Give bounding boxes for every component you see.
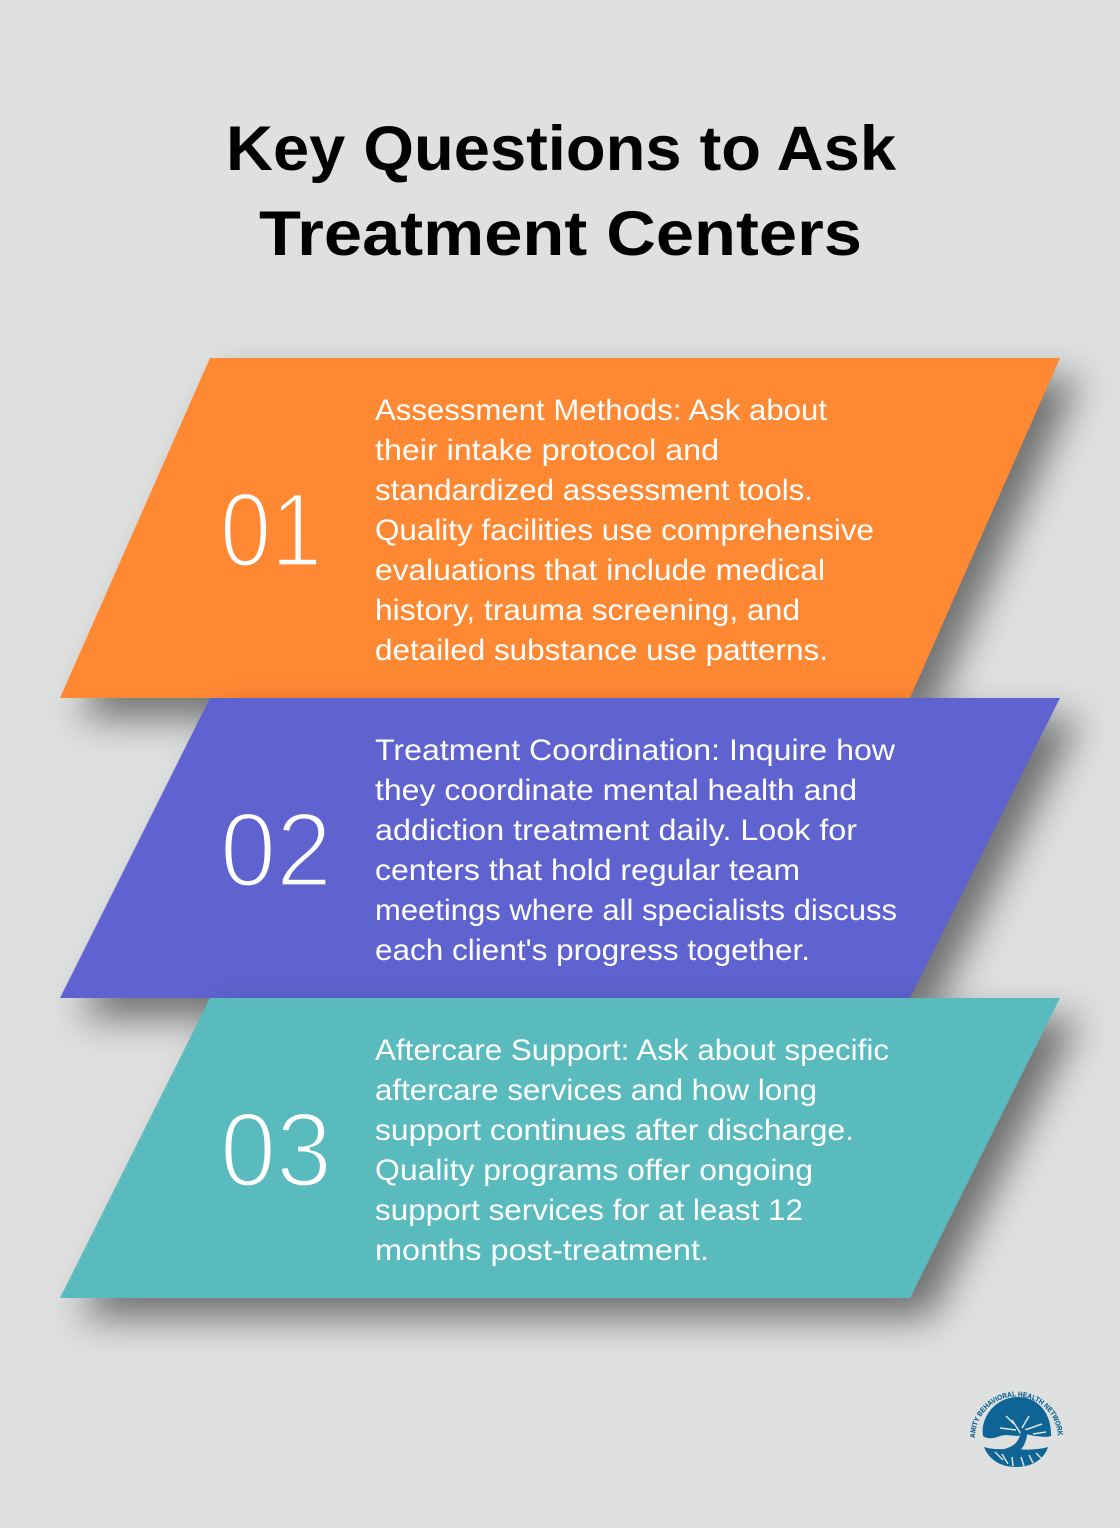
text block: assessment methods: detailed substance use patterns. — [375, 634, 828, 667]
text block: assessment methods: history, trauma screening, and — [375, 594, 800, 627]
text: logo ring label: AMITY BEHAVIORAL HEALTH NETWORK — [970, 1392, 1063, 1438]
text block: aftercare support — [375, 1034, 889, 1267]
text block: aftercare support: months post-treatment. — [375, 1234, 709, 1267]
logo: Amity Behavioral Health Network — [970, 1392, 1063, 1467]
text block: assessment methods: their intake protocol and — [375, 434, 719, 467]
text block: aftercare support: support continues after discharge. — [375, 1114, 854, 1147]
text block: aftercare support: support services for at least 12 — [375, 1194, 803, 1227]
icon: tree branches — [1000, 1416, 1046, 1434]
parallelogram: orange band — [60, 358, 1060, 698]
text block: aftercare support: Aftercare Support: Ask about specific — [375, 1034, 889, 1067]
title — [226, 114, 897, 269]
text block: treatment coordination: each client's progress together. — [375, 934, 810, 967]
number: 03: 03 — [220, 1092, 332, 1209]
text block: assessment methods: Quality facilities use comprehensive — [375, 514, 874, 547]
text block: treatment coordination: meetings where all specialists discuss — [375, 894, 897, 927]
text block: treatment coordination: they coordinate mental health and — [375, 774, 857, 807]
parallelogram: purple band — [60, 698, 1060, 998]
text block: aftercare support: aftercare services and how long — [375, 1074, 817, 1107]
text block: treatment coordination: centers that hold regular team — [375, 854, 800, 887]
text block: aftercare support: Quality programs offer ongoing — [375, 1154, 813, 1187]
number: 01: 01 — [220, 472, 322, 589]
parallelogram: teal band — [60, 998, 1060, 1298]
text block: assessment methods: Assessment Methods: Ask about — [375, 394, 828, 427]
text block: assessment methods — [375, 394, 874, 667]
text block: assessment methods: standardized assessment tools. — [375, 474, 813, 507]
number: 02: 02 — [220, 792, 332, 909]
panel: step 03 aftercare support — [60, 998, 1080, 1318]
icon: tree trunk — [1004, 1430, 1030, 1456]
text block: treatment coordination: Treatment Coordination: Inquire how — [375, 734, 895, 767]
title: Treatment Centers — [259, 199, 862, 269]
text block: assessment methods: evaluations that include medical — [375, 554, 825, 587]
icon: roots — [984, 1447, 1048, 1467]
title: Key Questions to Ask — [226, 114, 897, 184]
panel: step 01 assessment methods — [60, 358, 1080, 718]
icon: tree canopy — [983, 1397, 1051, 1438]
text block: treatment coordination — [375, 734, 897, 967]
panel: step 02 treatment coordination — [60, 698, 1080, 1018]
text block: treatment coordination: addiction treatment daily. Look for — [375, 814, 857, 847]
